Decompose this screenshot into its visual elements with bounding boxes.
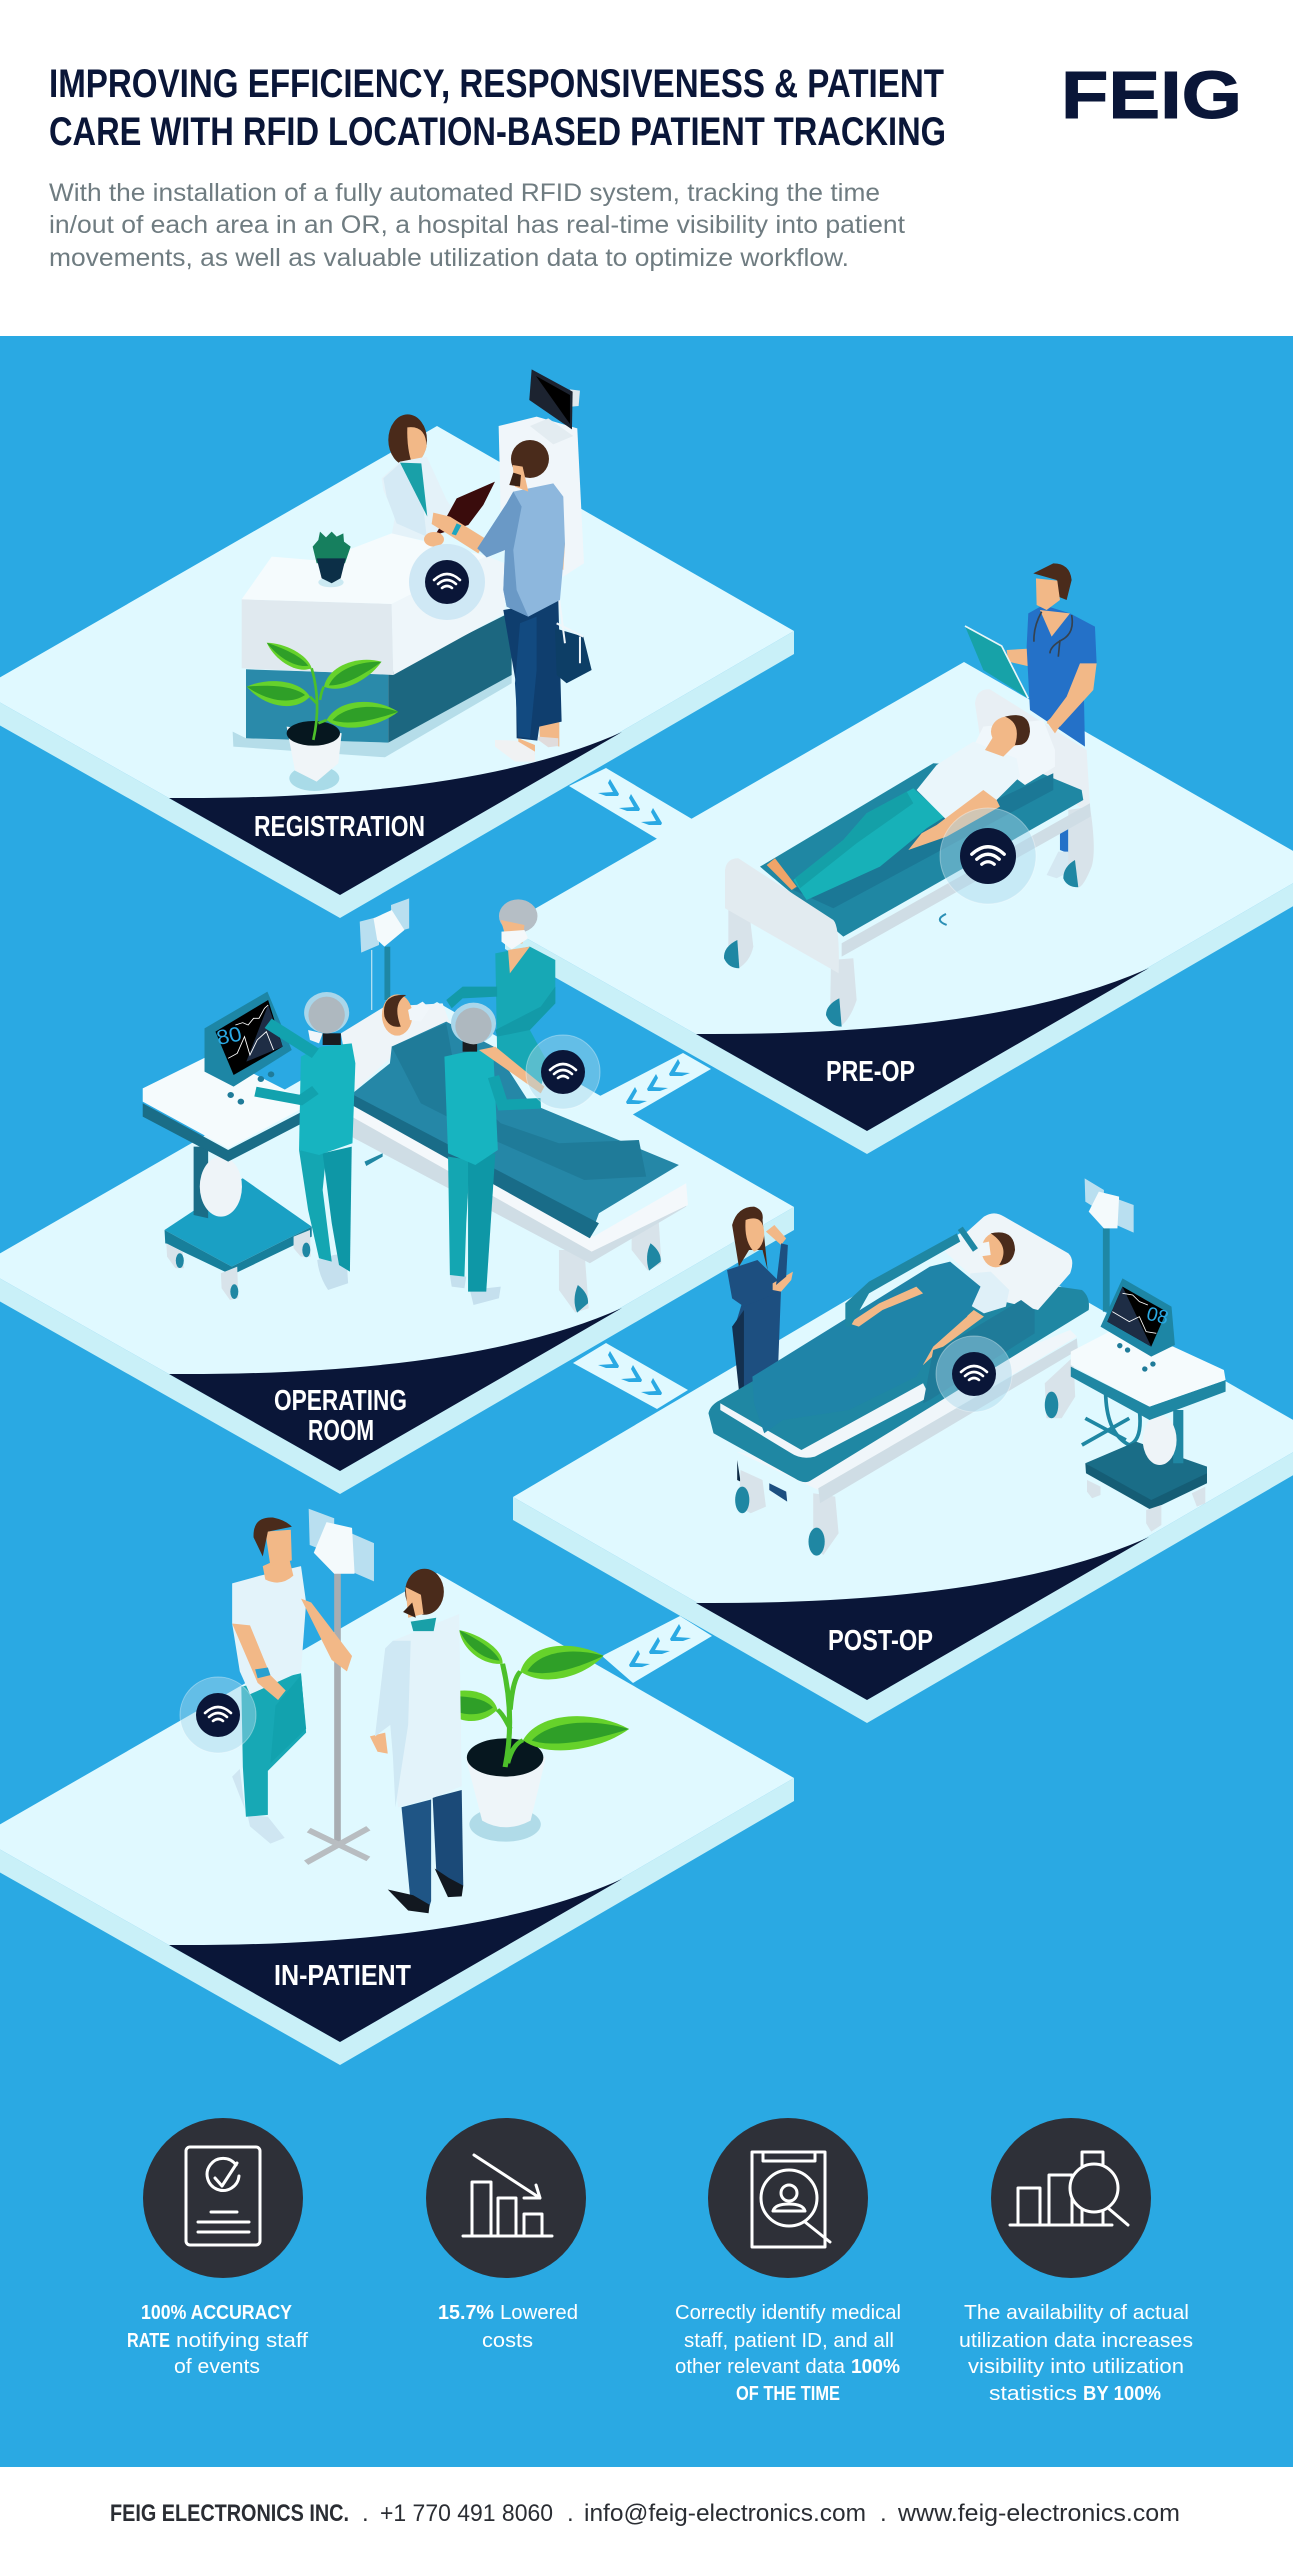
- label: pre-op: PRE-OP: [826, 1056, 915, 1088]
- footer contact line: FEIG ELECTRONICS INC.: [110, 2500, 349, 2527]
- stat text: utilization: utilization data increases: [959, 2330, 1193, 2352]
- stat text: utilization: statistics: [989, 2383, 1077, 2405]
- connector: pre-op to operating room: [598, 1053, 711, 1115]
- surgeon standing behind: [446, 899, 555, 1087]
- cart with monitor: 08: [1144, 1303, 1171, 1329]
- stat text: utilization: [959, 2302, 1193, 2405]
- patient under sheet: [352, 994, 679, 1238]
- label: registration: REGISTRATION: [254, 811, 425, 843]
- stat text: accuracy: notifying staff: [176, 2330, 308, 2352]
- stat text: accuracy: [127, 2302, 308, 2378]
- RFID badge: in-patient: [180, 1677, 256, 1753]
- intro paragraph: [49, 179, 905, 272]
- patient: [767, 712, 1065, 900]
- patient on stretcher: [752, 1228, 1035, 1433]
- scene: pre-op bed and nurse: [724, 563, 1097, 1027]
- scene: operating room: [143, 898, 688, 1313]
- stat text: accuracy: RATE: [127, 2330, 170, 2352]
- bed frame back: [975, 689, 1094, 887]
- footer contact line: www.feig-electronics.com: [897, 2500, 1180, 2527]
- doctor: [370, 1569, 463, 1913]
- pillow: [341, 1003, 450, 1093]
- stat icon: identify person: [708, 2118, 868, 2278]
- IV stand: [360, 898, 409, 1010]
- stat text: utilization: BY 100%: [1083, 2383, 1161, 2405]
- stat text: identification: OF THE TIME: [736, 2383, 840, 2405]
- pillow: [973, 720, 1055, 785]
- RFID badge: post-op: [936, 1336, 1012, 1412]
- stat text: identification: [675, 2302, 901, 2405]
- stat icon: falling cost chart: [426, 2118, 586, 2278]
- connector: post-op to in-patient: [602, 1616, 712, 1683]
- mattress: [760, 763, 1091, 957]
- nurse at monitor: [255, 992, 355, 1290]
- stat text: identification: other relevant data: [675, 2356, 846, 2378]
- connector: operating room to post-op: [573, 1343, 688, 1409]
- visitor woman: [727, 1207, 793, 1502]
- footer contact line: [110, 2500, 1180, 2527]
- nurse by patient: [444, 1003, 544, 1305]
- stretcher legs: [735, 1330, 1078, 1556]
- connector: registration to pre-op: [569, 768, 697, 843]
- label: post-op: POST-OP: [828, 1625, 933, 1657]
- platform: in-patient: [0, 1573, 794, 2065]
- title: CARE WITH RFID LOCATION-BASED PATIENT TRACKING: [49, 110, 946, 154]
- folder and hands: [424, 482, 495, 547]
- intro paragraph: movements, as well as valuable utilization data to optimize workflow.: [49, 244, 849, 272]
- footer contact line: .: [362, 2500, 369, 2527]
- intro paragraph: in/out of each area in an OR, a hospital has real-time visibility into patient: [49, 211, 905, 239]
- reception desk: [242, 533, 512, 743]
- label: operating room: OPERATING: [274, 1385, 407, 1417]
- patient monitor: [205, 992, 292, 1105]
- stat text: accuracy: of events: [174, 2356, 260, 2378]
- RFID badge: operating room: [526, 1035, 600, 1109]
- stat icon: utilization chart: [991, 2118, 1151, 2278]
- stat text: identification: staff, patient ID, and all: [684, 2330, 894, 2352]
- stat text: costs: Lowered: [500, 2302, 578, 2324]
- patient with IV: [232, 1517, 352, 1844]
- footer contact line: .: [567, 2500, 574, 2527]
- title: [49, 62, 946, 154]
- cart with monitor: [1071, 1278, 1226, 1532]
- shadow under desk: [233, 673, 512, 757]
- potted plant large: [430, 1625, 632, 1842]
- stat text: utilization: The availability of actual: [964, 2302, 1189, 2324]
- footer contact line: info@feig-electronics.com: [584, 2500, 866, 2527]
- potted plant: [245, 637, 399, 791]
- stat text: costs: 15.7%: [438, 2302, 494, 2324]
- small crescent mark: [940, 914, 947, 925]
- platform: operating room: [0, 1002, 794, 1494]
- patient monitor: 80: [214, 1022, 244, 1050]
- stretcher mattress: [708, 1287, 1089, 1482]
- IV pole: [306, 1509, 374, 1863]
- footer contact line: .: [880, 2500, 887, 2527]
- patient at desk: [432, 440, 592, 762]
- scene: in-patient: [232, 1509, 632, 1913]
- operating table base: [344, 1097, 688, 1313]
- IV stand: [1085, 1178, 1134, 1312]
- platform: registration: [0, 426, 794, 918]
- kiosk column with monitor: [499, 369, 584, 577]
- label: operating room: ROOM: [308, 1415, 374, 1447]
- platform: post-op: [513, 1231, 1293, 1723]
- stat text: identification: 100%: [851, 2356, 900, 2378]
- title: IMPROVING EFFICIENCY, RESPONSIVENESS & PATIENT: [49, 62, 944, 106]
- RFID badge: registration: [409, 544, 485, 620]
- nurse: [965, 563, 1097, 878]
- stat text: accuracy: 100% ACCURACY: [141, 2302, 293, 2324]
- stat icon: accuracy document: [143, 2118, 303, 2278]
- label: operating room: [274, 1385, 407, 1447]
- pillow raised: [945, 1213, 1072, 1310]
- scene: registration desk: [233, 369, 592, 791]
- stat text: identification: Correctly identify medical: [675, 2302, 901, 2324]
- scene: post-op: [708, 1178, 1226, 1556]
- RFID badge: pre-op: [940, 808, 1036, 904]
- desk plant small: [313, 532, 351, 587]
- footboard and legs: [724, 858, 857, 1027]
- logo: FEIG: FEIG: [1061, 58, 1242, 133]
- footer contact line: +1 770 491 8060: [380, 2500, 553, 2527]
- platform: pre-op: [505, 662, 1293, 1154]
- label: in-patient: IN-PATIENT: [274, 1960, 411, 1992]
- stat text: costs: [438, 2302, 578, 2352]
- receptionist: [382, 414, 453, 540]
- monitor table: [143, 1053, 312, 1300]
- stat text: utilization: visibility into utilization: [968, 2356, 1184, 2378]
- intro paragraph: With the installation of a fully automated RFID system, tracking the time: [49, 179, 880, 207]
- stat text: costs: costs: [482, 2330, 533, 2352]
